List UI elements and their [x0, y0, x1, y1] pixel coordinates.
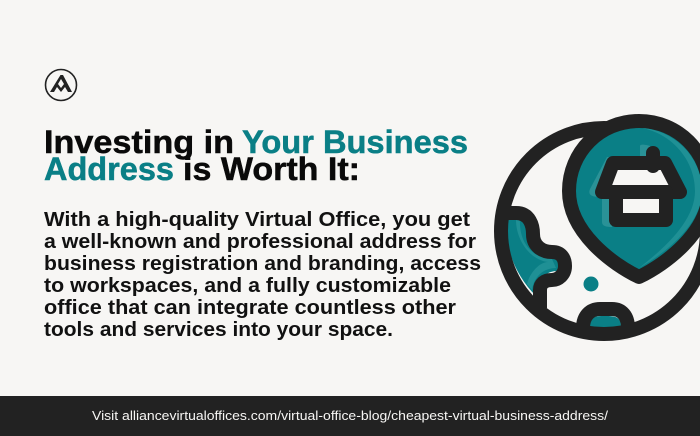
- body text: [44, 209, 481, 341]
- body text: to workspaces, and a fully customizable: [44, 275, 451, 297]
- location pin: [569, 121, 700, 277]
- island outline: [583, 309, 628, 328]
- footer link text: Visit alliancevirtualoffices.com/virtual-office-blog/cheapest-virtual-business-address/: [92, 408, 608, 423]
- title: [44, 124, 468, 187]
- logo: [46, 70, 76, 100]
- house shadow: [589, 145, 650, 227]
- body text: office that can integrate countless other: [44, 297, 456, 319]
- title: Address: [44, 151, 174, 187]
- body text: With a high-quality Virtual Office, you get: [44, 209, 470, 231]
- continent outline: [506, 213, 565, 308]
- house: [602, 153, 680, 220]
- title: is Worth It:: [183, 151, 360, 187]
- globe island fill: [589, 316, 621, 328]
- body text: a well-known and professional address for: [44, 231, 476, 253]
- pin highlight: [639, 128, 700, 268]
- teal dot: [584, 276, 598, 292]
- icon: globe with location pin: [501, 121, 700, 334]
- footer bar: [0, 396, 700, 436]
- globe continent fill: [506, 215, 564, 296]
- continent highlight: [516, 220, 556, 290]
- title: Investing in: [44, 124, 234, 160]
- globe outline: [501, 128, 700, 334]
- body text: tools and services into your space.: [44, 319, 393, 341]
- title: Your Business: [242, 124, 468, 160]
- body text: business registration and branding, access: [44, 253, 481, 275]
